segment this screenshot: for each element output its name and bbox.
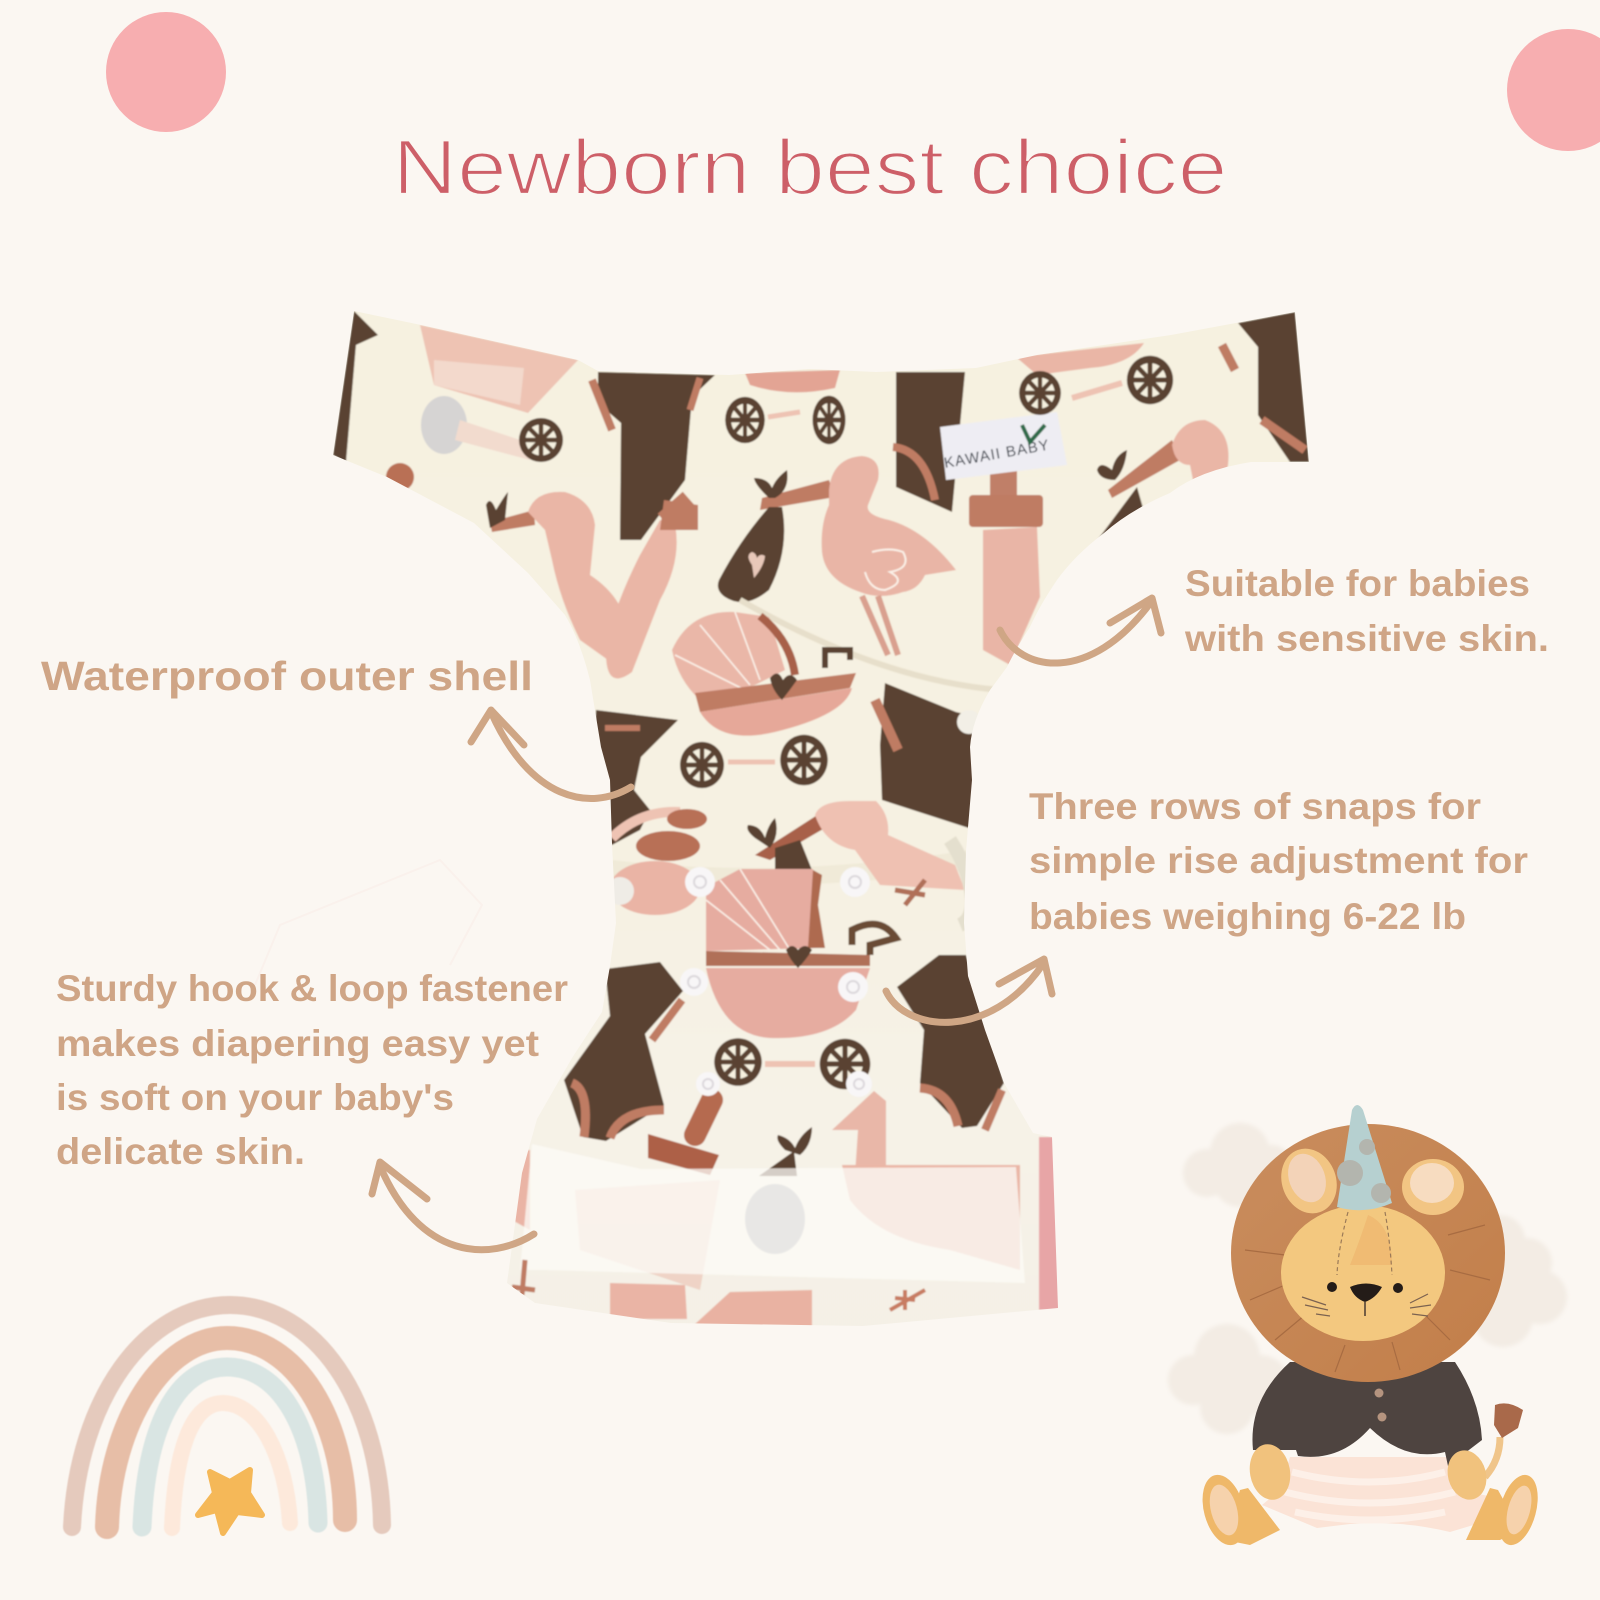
rainbow inner arc	[172, 1403, 290, 1528]
lion party hat	[1337, 1105, 1392, 1210]
icon: star	[198, 1470, 262, 1533]
central stork	[718, 456, 956, 655]
face seam and patch	[1337, 1212, 1392, 1275]
jacket buttons	[1374, 1388, 1386, 1422]
under-panel print	[512, 1137, 1060, 1310]
brown onesie: lower left	[564, 962, 683, 1141]
lower stork print	[747, 801, 965, 905]
title: Newborn best choice	[392, 123, 1228, 211]
lion feet	[1195, 1470, 1545, 1550]
callout: hook and loop fastener	[56, 968, 568, 1172]
fold shadow across crotch	[740, 600, 1000, 690]
callout: sensitive skin: with sensitive skin.	[1184, 618, 1549, 659]
lion ears	[1272, 1141, 1464, 1221]
bottom print	[512, 1260, 925, 1328]
left stork	[486, 492, 628, 665]
terracotta blobs	[606, 809, 707, 915]
callout: hook and loop fastener: delicate skin.	[56, 1131, 305, 1172]
callout: hook and loop fastener: is soft on your baby's	[56, 1077, 454, 1118]
callout: sensitive skin: Suitable for babies	[1185, 563, 1530, 604]
rainbow outer arc	[72, 1305, 382, 1527]
rainbow third arc	[142, 1367, 318, 1527]
lion tail	[1485, 1403, 1523, 1477]
brown onesie behind label	[896, 372, 965, 512]
callout: sensitive skin	[1184, 563, 1549, 659]
brown onesie: lower right	[897, 955, 1004, 1130]
velcro landing panel	[520, 1144, 1025, 1283]
bottle: left	[606, 520, 677, 678]
mane strands	[1245, 1225, 1490, 1372]
arrow: to snaps callout	[886, 959, 1052, 1022]
elastic waistband ruffle	[745, 370, 840, 392]
lion arms	[1245, 1441, 1492, 1504]
lower bottle print	[648, 1100, 719, 1175]
snap buttons	[680, 867, 872, 1097]
lion face	[1281, 1205, 1445, 1341]
brown onesie: left middle	[590, 710, 680, 845]
upper pram print	[672, 612, 856, 788]
brown onesie: right middle	[870, 682, 972, 828]
woven brand label	[940, 412, 1067, 480]
callout: hook and loop fastener: Sturdy hook & loop fastener	[56, 968, 568, 1009]
lion mane	[1231, 1124, 1505, 1382]
top wheels	[725, 396, 846, 444]
clouds behind lion	[1168, 1123, 1567, 1434]
arrow: to fastener callout	[372, 1162, 534, 1250]
lower pram print	[706, 869, 896, 1089]
lion illustration	[1168, 1105, 1567, 1550]
decorative circle: top left	[106, 12, 226, 132]
diaper fabric base	[320, 300, 1320, 1340]
callout: rows of snaps	[1029, 786, 1528, 937]
fold band shading	[613, 854, 954, 883]
lion trousers	[1262, 1457, 1493, 1532]
elastic gathers: right	[950, 840, 972, 925]
left tab print	[333, 311, 578, 491]
arrow: to waterproof callout	[471, 710, 631, 798]
callout: hook and loop fastener: makes diapering easy yet	[56, 1023, 539, 1064]
faint doodle outline	[255, 860, 482, 985]
callout: rows of snaps: Three rows of snaps for	[1029, 786, 1481, 827]
bottle: right	[969, 470, 1043, 665]
rainbow second arc	[107, 1338, 345, 1527]
right stork	[1096, 420, 1229, 538]
brown onesie: top left	[592, 372, 715, 540]
rainbow illustration	[72, 1305, 382, 1528]
callout: waterproof outer shell: Waterproof outer shell	[41, 653, 533, 699]
lion eyes and nose	[1327, 1282, 1403, 1316]
callout: rows of snaps: simple rise adjustment for	[1029, 840, 1528, 881]
right tab print	[1222, 312, 1309, 462]
woven brand label: KAWAII BABY	[943, 437, 1050, 472]
top right pram print	[1016, 343, 1173, 415]
diaper photo illustration	[320, 300, 1320, 1340]
lion jacket	[1252, 1362, 1482, 1466]
callout: rows of snaps: babies weighing 6-22 lb	[1029, 896, 1466, 937]
lion whiskers	[1302, 1294, 1431, 1316]
decorative circle: top right	[1507, 29, 1600, 151]
arrow: to sensitive skin callout	[1000, 598, 1161, 663]
lower leaves and bag	[759, 1127, 812, 1176]
lower pink leg print	[832, 1091, 886, 1175]
